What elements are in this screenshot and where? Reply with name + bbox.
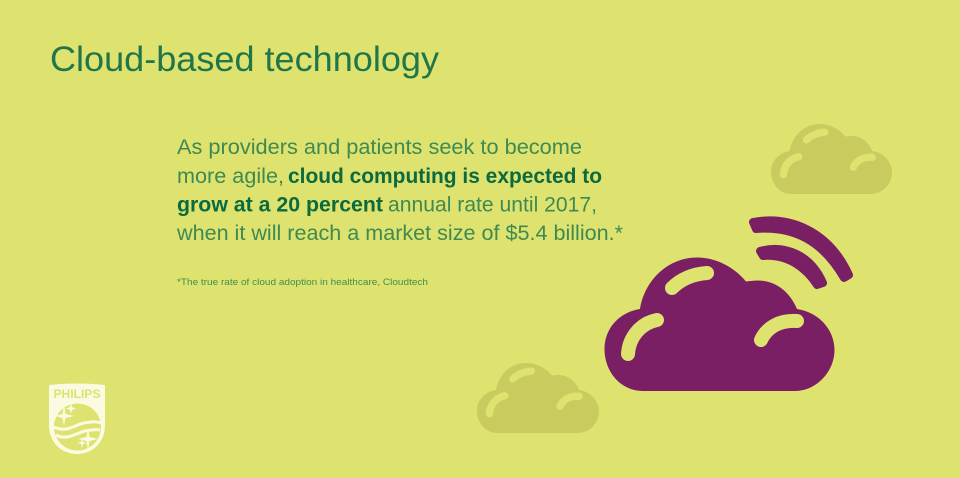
icon: Philips shield logo bbox=[49, 384, 105, 454]
body text: grow at a 20 percent bbox=[177, 192, 383, 216]
icon: small cloud top right bbox=[771, 124, 892, 194]
icon: large purple cloud with signal waves bbox=[604, 220, 849, 391]
title: Cloud-based technology bbox=[50, 40, 440, 79]
body text: more agile, bbox=[177, 164, 284, 188]
logo wordmark: PHILIPS bbox=[54, 389, 101, 401]
body text bbox=[176, 135, 624, 245]
body text: cloud computing is expected to bbox=[288, 164, 602, 188]
body text: when it will reach a market size of $5.4 billion.* bbox=[176, 221, 624, 245]
body text: annual rate until 2017, bbox=[388, 192, 597, 216]
logo emblem bbox=[54, 403, 101, 450]
footnote: *The true rate of cloud adoption in healthcare, Cloudtech bbox=[177, 277, 428, 288]
body text: As providers and patients seek to become bbox=[177, 135, 582, 159]
icon: small cloud bottom centre bbox=[477, 363, 599, 433]
icon: signal waves bbox=[753, 220, 849, 285]
